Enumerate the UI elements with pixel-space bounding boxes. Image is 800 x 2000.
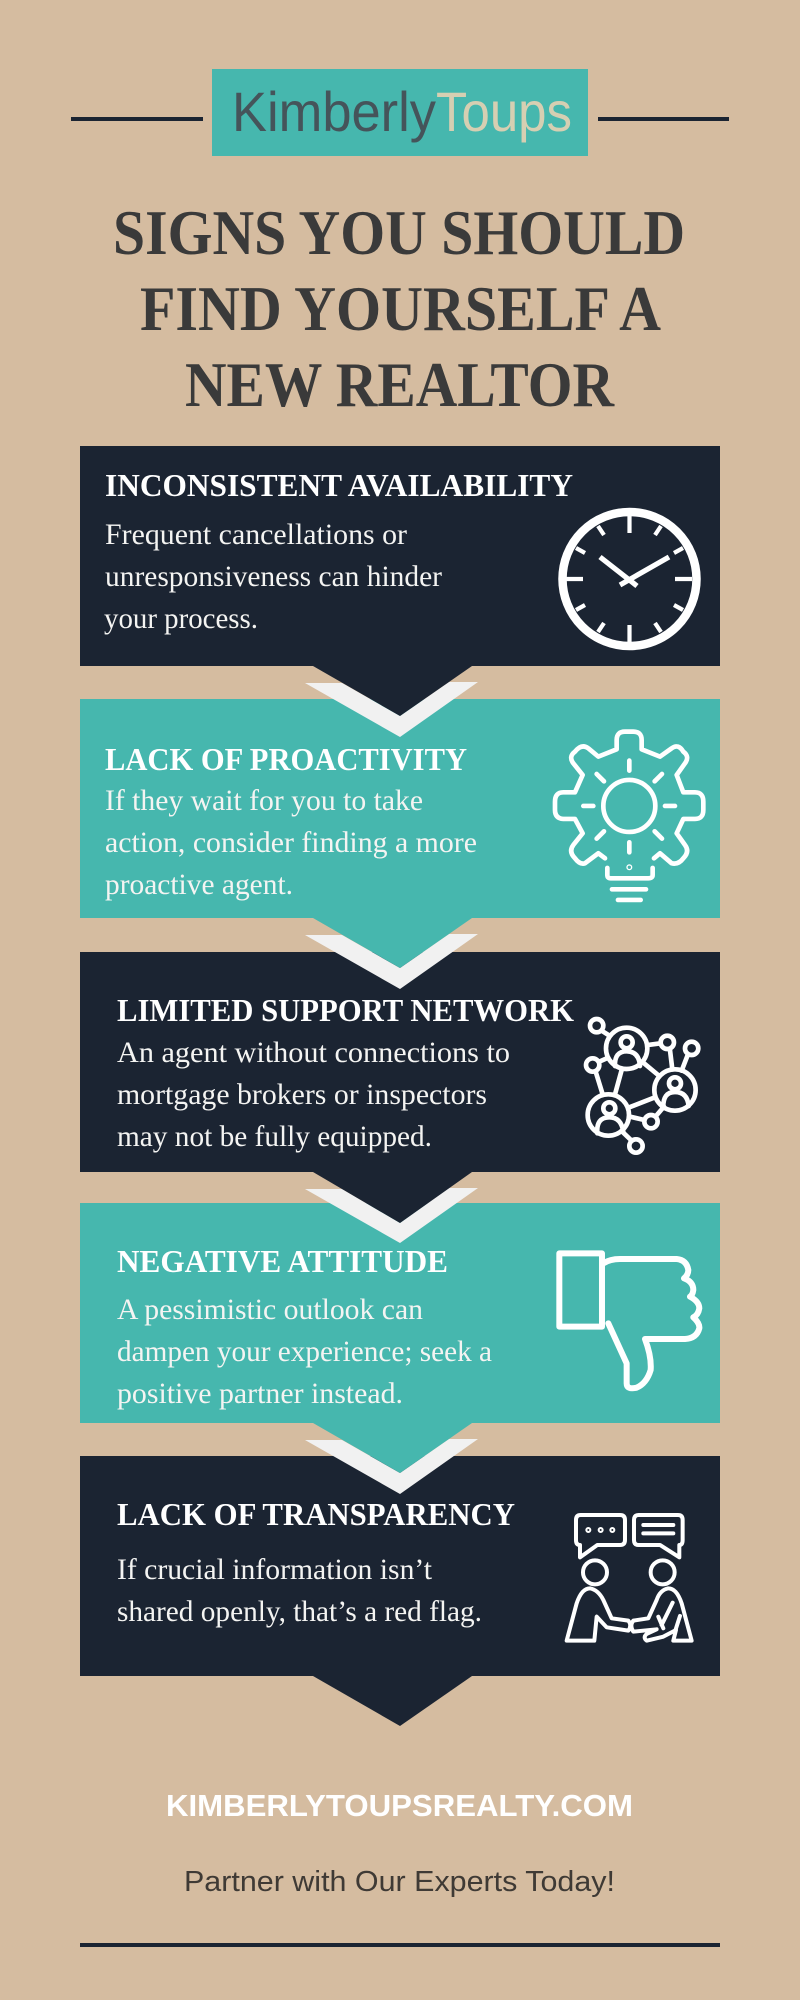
- title: NEW REALTOR: [185, 349, 615, 420]
- body: lack of proactivity: proactive agent.: [105, 869, 293, 901]
- panel: limited support network: [80, 952, 720, 1223]
- body: negative attitude: positive partner instead.: [117, 1378, 403, 1410]
- body: negative attitude: A pessimistic outlook can: [117, 1294, 423, 1326]
- body: inconsistent availability: [104, 519, 442, 635]
- logo header: Kimberly: [232, 80, 436, 143]
- panel: negative attitude: [80, 1203, 720, 1473]
- body: lack of transparency: shared openly, that’s a red flag.: [117, 1596, 482, 1628]
- body: inconsistent availability: unresponsiveness can hinder: [105, 561, 442, 593]
- body: inconsistent availability: Frequent cancellations or: [105, 519, 407, 551]
- icon: handshake conversation: [567, 1515, 692, 1641]
- chevron 1: [305, 682, 478, 737]
- heading: lack of transparency: LACK OF TRANSPARENCY: [117, 1496, 515, 1532]
- panel: lack of transparency: [80, 1456, 720, 1726]
- logo header: [71, 69, 729, 156]
- heading: negative attitude: NEGATIVE ATTITUDE: [117, 1243, 448, 1279]
- panel: lack of proactivity: [80, 699, 720, 968]
- logo header: Toups: [436, 80, 572, 143]
- tagline: Partner with Our Experts Today!: [184, 1866, 615, 1898]
- panel: inconsistent availability: [80, 446, 720, 716]
- chevron 4: [305, 1439, 478, 1494]
- body: limited support network: mortgage brokers or inspectors: [117, 1079, 487, 1111]
- title: FIND YOURSELF A: [140, 273, 661, 344]
- body: inconsistent availability: your process.: [104, 603, 258, 635]
- body: lack of transparency: [117, 1554, 482, 1628]
- body: lack of proactivity: action, consider finding a more: [105, 827, 477, 859]
- icon: people network: [586, 1019, 698, 1153]
- chevron 3: [305, 1188, 478, 1243]
- body: lack of transparency: If crucial information isn’t: [117, 1554, 433, 1586]
- body: limited support network: [117, 1037, 510, 1153]
- icon: gear light bulb: [555, 732, 703, 900]
- body: negative attitude: [117, 1294, 492, 1410]
- body: limited support network: may not be fully equipped.: [117, 1121, 432, 1153]
- heading: lack of proactivity: LACK OF PROACTIVITY: [105, 741, 467, 777]
- icon: thumbs down: [559, 1253, 699, 1388]
- heading: limited support network: LIMITED SUPPORT NETWORK: [117, 992, 574, 1028]
- body: lack of proactivity: [105, 785, 477, 901]
- title: SIGNS YOU SHOULD: [113, 197, 685, 268]
- body: negative attitude: dampen your experience; seek a: [117, 1336, 492, 1368]
- website url: KIMBERLYTOUPSREALTY.COM: [166, 1788, 633, 1823]
- chevron 2: [305, 934, 478, 989]
- body: limited support network: An agent without connections to: [117, 1037, 510, 1069]
- body: lack of proactivity: If they wait for you to take: [105, 785, 423, 817]
- icon: clock: [562, 512, 696, 646]
- heading: inconsistent availability: INCONSISTENT AVAILABILITY: [105, 467, 573, 503]
- title: [113, 197, 685, 420]
